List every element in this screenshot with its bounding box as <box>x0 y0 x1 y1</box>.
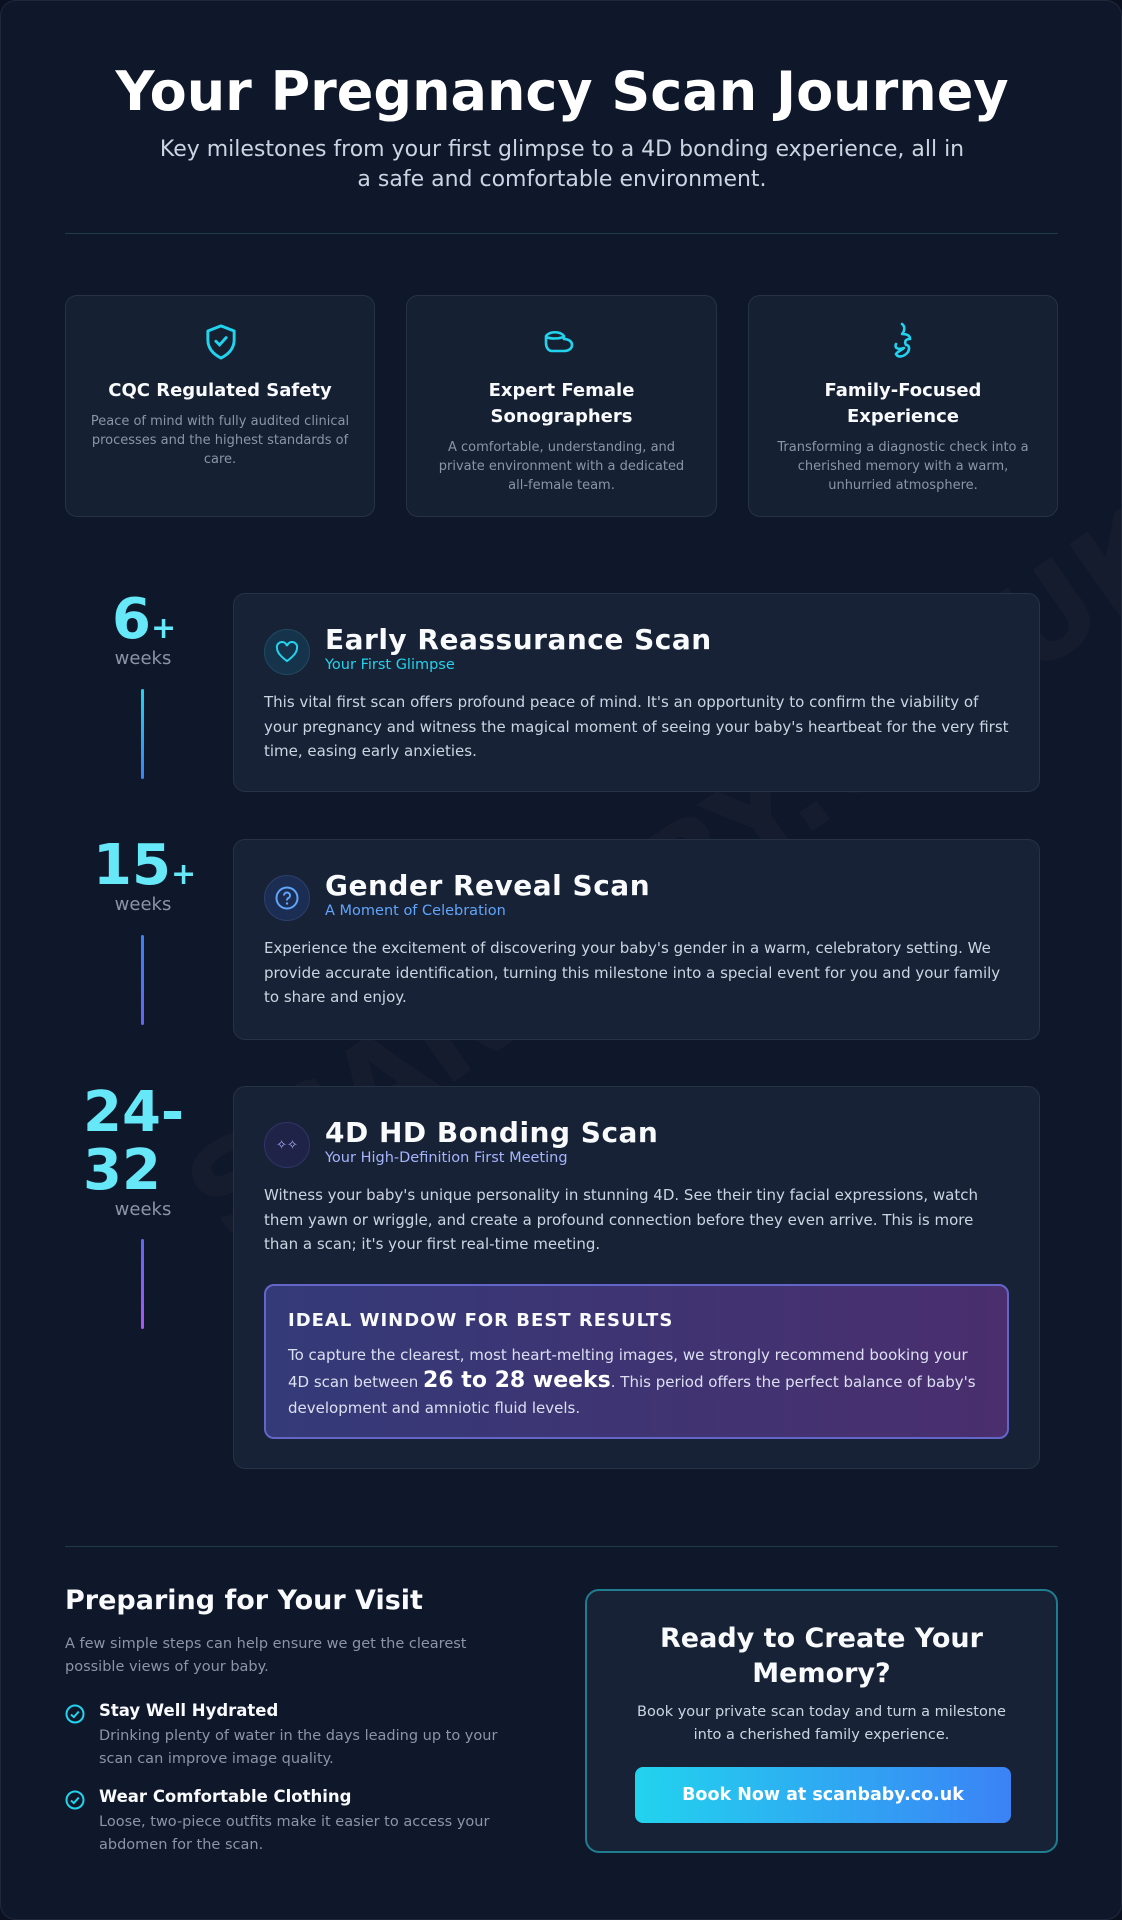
panel: preparing <box>65 1585 498 1853</box>
icon: sparkle <box>264 1122 310 1168</box>
subtitle: Key milestones from your first glimpse to a 4D bonding experience, all in <box>160 137 964 162</box>
heading: Preparing for Your Visit <box>65 1585 423 1616</box>
icon: thumbs <box>894 322 912 358</box>
panel: gender scan: A Moment of Celebration <box>325 903 506 919</box>
heading: Early Reassurance Scan <box>325 623 712 656</box>
timeline marker: 24-32 <box>83 1080 184 1329</box>
timeline marker: 6+ <box>112 587 176 779</box>
heading: Ready to Create Your <box>660 1623 983 1654</box>
callout: ideal window: To capture the clearest, most heart-melting images, we strongly recommend booking your 4D scan between 26 to 28 weeks. This period offers the perfect balance of baby's development and amniotic fluid levels. <box>288 1346 976 1417</box>
item: clothing: Wear Comfortable Clothing <box>99 1787 351 1806</box>
panel: 4D scan: Your High-Definition First Meeting <box>325 1150 568 1166</box>
heading: Experience <box>847 406 959 427</box>
heading: Expert Female <box>489 380 634 401</box>
timeline marker: 6+: weeks <box>115 648 171 669</box>
timeline marker: 6+: 6+ <box>112 587 176 652</box>
timeline marker: 24-32: weeks <box>115 1199 171 1220</box>
button: Book Now at scanbaby.co.uk <box>682 1785 964 1805</box>
heading: 4D HD Bonding Scan <box>325 1116 658 1149</box>
heading: Family-Focused <box>825 380 981 401</box>
text: Book your private scan today and turn a milestone into a cherished family experience. <box>637 1704 1006 1743</box>
icon: sparkle: ✧✧ <box>276 1138 298 1152</box>
icon: heart <box>264 629 310 675</box>
panel: early scan <box>233 593 1040 792</box>
timeline marker: 24-32: 32 <box>83 1138 161 1203</box>
title: Your Pregnancy Scan Journey <box>115 60 1009 123</box>
item: hydrated <box>66 1701 498 1767</box>
item: hydrated: Drinking plenty of water in the days leading up to your scan can improve image quality. <box>99 1728 497 1767</box>
icon: hand <box>544 331 574 352</box>
timeline marker: 24-32: 24- <box>83 1080 184 1145</box>
item: clothing: Loose, two-piece outfits make it easier to access your abdomen for the scan. <box>99 1814 489 1853</box>
heading: Sonographers <box>491 406 632 427</box>
text: A few simple steps can help ensure we get the clearest possible views of your baby. <box>65 1636 466 1675</box>
timeline marker: 15+ <box>93 833 196 1025</box>
heading: CQC Regulated Safety <box>108 380 332 401</box>
text: Experience the excitement of discovering your baby's gender in a warm, celebratory setting. We provide accurate identification, turning this milestone into a special event for you and your family to share and enjoy. <box>264 939 1000 1006</box>
timeline marker: 15+: 15+ <box>93 833 196 898</box>
panel: early scan: Your First Glimpse <box>325 657 455 673</box>
panel: gender scan <box>233 839 1040 1040</box>
text: A comfortable, understanding, and private environment with a dedicated all-female team. <box>439 440 684 493</box>
text: Witness your baby's unique personality in stunning 4D. See their tiny facial expressions, watch them yawn or wriggle, and create a profound connection before they even arrive. This is more than a scan; it's your first real-time meeting. <box>264 1186 978 1253</box>
panel: sonographers <box>406 295 717 517</box>
panel: family <box>748 295 1058 517</box>
subtitle <box>160 137 964 192</box>
callout: ideal window: IDEAL WINDOW FOR BEST RESULTS <box>288 1310 673 1331</box>
heading: Memory? <box>752 1658 891 1689</box>
callout: ideal window <box>264 1284 1009 1439</box>
item: clothing <box>66 1787 490 1853</box>
heading <box>489 380 634 427</box>
panel: CTA <box>585 1589 1058 1853</box>
text: Transforming a diagnostic check into a cherished memory with a warm, unhurried atmosphere. <box>777 440 1029 493</box>
icon: shield <box>206 324 236 360</box>
text: This vital first scan offers profound peace of mind. It's an opportunity to confirm the viability of your pregnancy and witness the magical moment of seeing your baby's heartbeat for the very first time, easing early anxieties. <box>264 693 1009 760</box>
heading <box>660 1623 983 1689</box>
heading <box>825 380 981 427</box>
text: Peace of mind with fully audited clinical processes and the highest standards of care. <box>91 414 349 467</box>
subtitle: a safe and comfortable environment. <box>357 167 767 192</box>
item: hydrated: Stay Well Hydrated <box>99 1701 278 1720</box>
icon: question <box>264 875 310 921</box>
button <box>635 1767 1011 1823</box>
panel: 4D scan <box>233 1086 1040 1469</box>
timeline marker: 15+: weeks <box>115 894 171 915</box>
panel: CQC <box>65 295 375 517</box>
heading: Gender Reveal Scan <box>325 869 650 902</box>
